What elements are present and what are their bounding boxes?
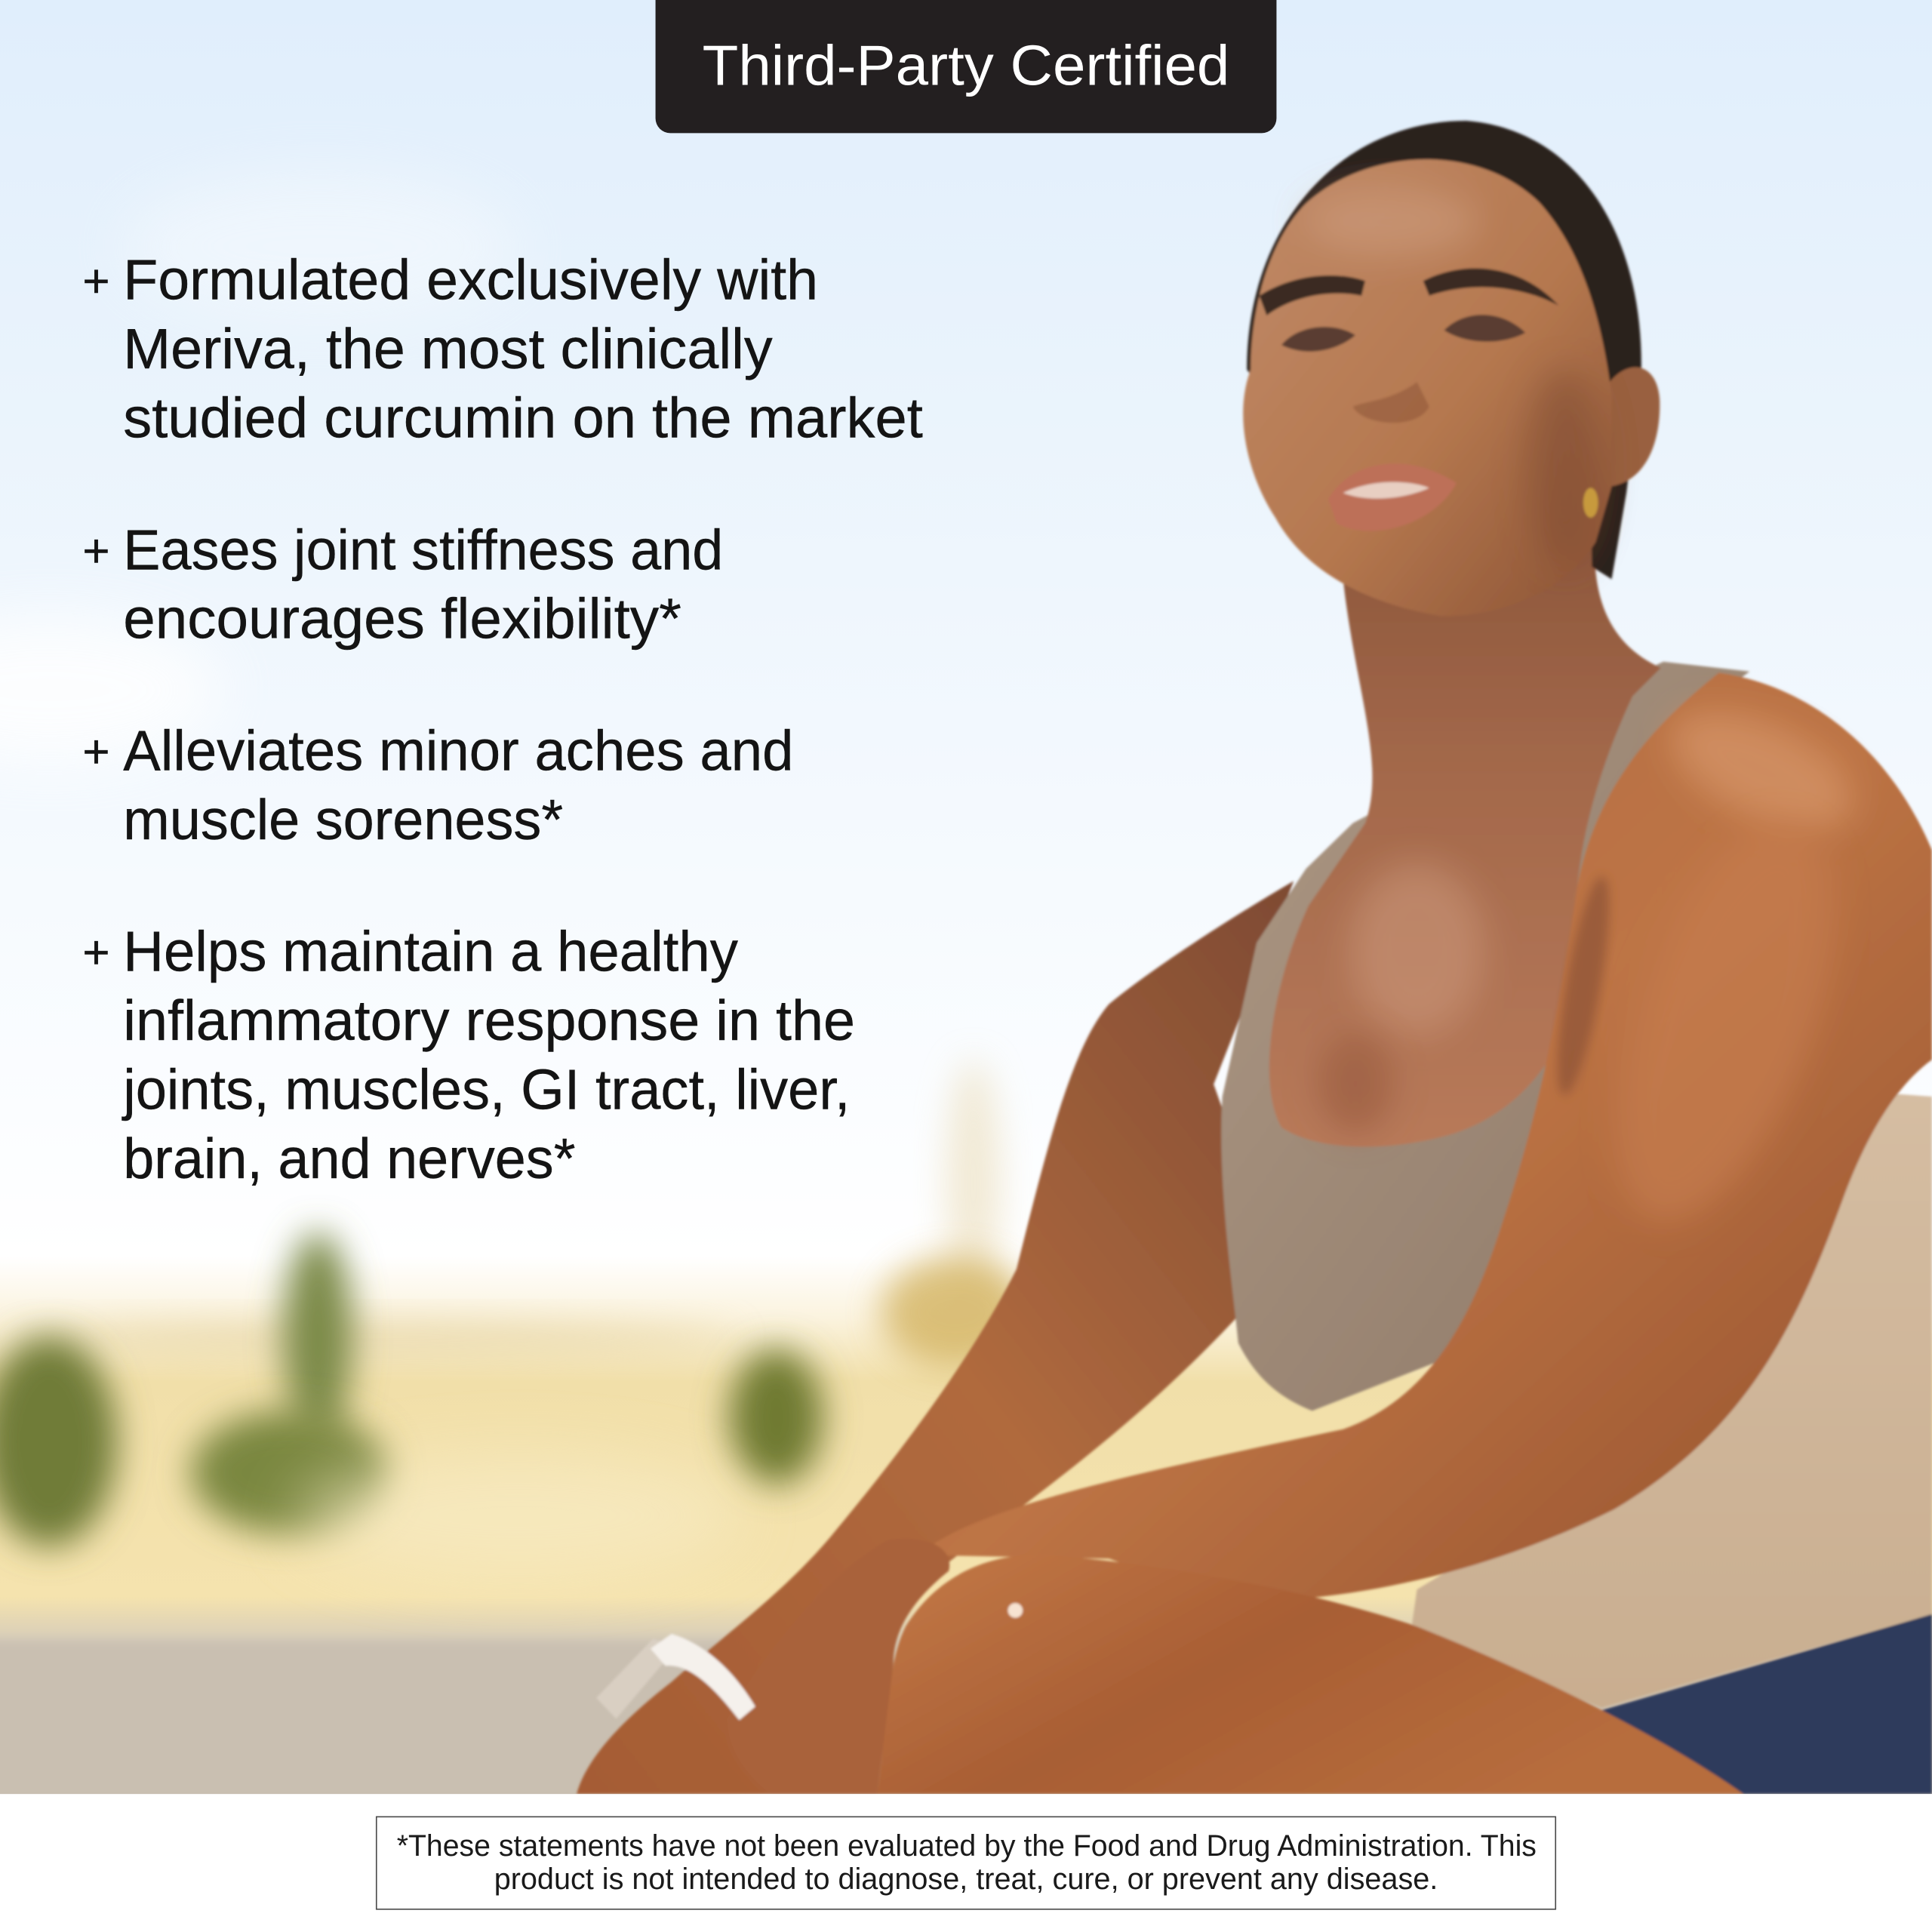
disclaimer box: product is not intended to diagnose, treat, cure, or prevent any disease. <box>494 1863 1438 1896</box>
hair <box>1247 121 1641 579</box>
lips <box>1328 463 1457 531</box>
head <box>1243 121 1660 616</box>
eyes <box>1281 315 1525 352</box>
teeth <box>1343 482 1429 499</box>
face <box>1243 159 1612 616</box>
right arm and shoulder <box>918 672 1932 1601</box>
chest highlight <box>1349 863 1484 1035</box>
badge: Third-Party Certified <box>656 0 1276 133</box>
benefit: joint stiffness: Eases joint stiffness and <box>123 518 723 581</box>
benefit: Meriva curcumin: Formulated exclusively with <box>123 248 818 312</box>
tank top back panel <box>1411 1091 1932 1708</box>
shoulder highlight <box>1668 705 1860 835</box>
benefit: Meriva curcumin: + <box>82 255 110 307</box>
benefit: inflammatory response: + <box>82 927 110 979</box>
benefit: aches and soreness <box>82 718 793 851</box>
knee highlight <box>1008 1603 1023 1618</box>
eyebrows <box>1260 268 1558 315</box>
athlete figure <box>577 121 1932 1794</box>
benefit: joint stiffness <box>82 518 723 651</box>
disclaimer box: *These statements have not been evaluated by the Food and Drug Administration. This <box>397 1829 1537 1863</box>
benefit: joint stiffness: + <box>82 525 110 577</box>
benefit: aches and soreness: + <box>82 726 110 778</box>
forehead highlight <box>1306 187 1478 257</box>
hand <box>727 1539 949 1794</box>
far arm <box>577 881 1294 1794</box>
benefit: Meriva curcumin: Meriva, the most clinically <box>123 317 773 380</box>
benefit: Meriva curcumin: studied curcumin on the market <box>123 386 923 450</box>
badge: Third-Party Certified: Third-Party Certified <box>703 34 1229 97</box>
arm inner shade <box>1555 875 1612 1096</box>
benefit: inflammatory response: inflammatory response in the <box>123 989 855 1052</box>
cheek shade <box>1527 370 1601 567</box>
gold earring <box>1583 488 1598 518</box>
benefit: Meriva curcumin <box>82 248 923 450</box>
benefit: joint stiffness: encourages flexibility* <box>123 587 681 651</box>
navy shorts <box>1601 1614 1932 1794</box>
thigh and knee <box>877 1555 1743 1794</box>
disclaimer box <box>377 1817 1555 1909</box>
benefit: inflammatory response: joints, muscles, GI tract, liver, <box>122 1057 851 1121</box>
benefit: aches and soreness: muscle soreness* <box>123 788 563 851</box>
nose shade <box>1353 382 1429 423</box>
tank top front <box>1221 662 1749 1411</box>
white smartwatch <box>596 1634 755 1720</box>
benefit: inflammatory response: Helps maintain a healthy <box>123 920 738 983</box>
upper arm light band <box>1623 855 1825 1217</box>
ear <box>1601 368 1660 487</box>
chest shade <box>1318 1035 1392 1134</box>
benefit: inflammatory response <box>82 920 855 1190</box>
neck and chest <box>1269 530 1661 1146</box>
benefit: inflammatory response: brain, and nerves* <box>123 1127 575 1190</box>
benefit: aches and soreness: Alleviates minor aches and <box>123 718 793 782</box>
